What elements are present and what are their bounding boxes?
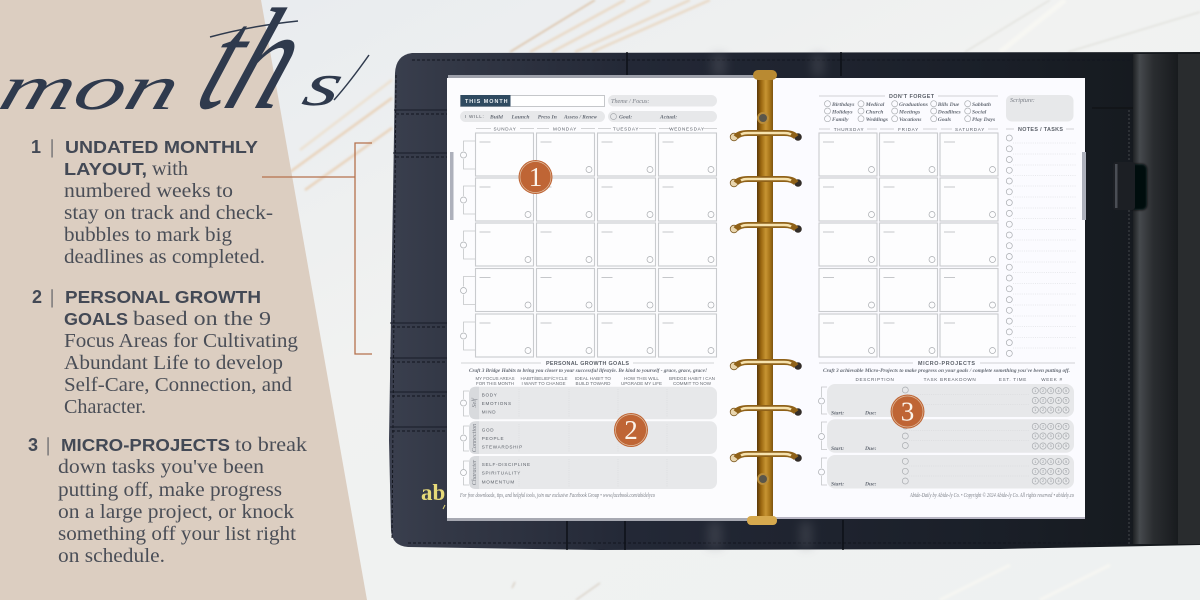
- don't forget: Bills Due: [937, 102, 960, 108]
- feature 2 text: [32, 286, 298, 418]
- gold spine: [757, 76, 773, 520]
- feature 1 text: LAYOUT,: [64, 159, 147, 179]
- micro-project column headers: [855, 377, 1063, 382]
- feature 1 text: stay on track and check-: [64, 202, 273, 224]
- micro-project row 2: 12345: [1034, 425, 1067, 429]
- micro-project row 3: 12345: [1034, 460, 1067, 464]
- scripture box: [1006, 95, 1074, 122]
- don't forget: DON'T FORGET: [889, 94, 935, 100]
- growth column headers: UPGRADE MY LIFE: [621, 381, 662, 386]
- micro-projects heading: MICRO-PROJECTS: [918, 361, 975, 367]
- growth row: connection: STEWARDSHIP: [482, 445, 523, 450]
- feature 2 text: based on the 9: [133, 308, 271, 330]
- micro-project row 2: Due:: [864, 446, 877, 452]
- growth column headers: HABIT/BELIEF/CYCLE: [520, 376, 568, 381]
- growth column headers: COMMIT TO NOW: [673, 381, 711, 386]
- growth row: character: SPIRITUALITY: [482, 471, 521, 476]
- notes and tasks: NOTES / TASKS: [1018, 127, 1063, 133]
- right day headers: THURSDAY: [834, 127, 864, 132]
- i will pill: Launch: [510, 114, 530, 120]
- feature 3 text: MICRO-PROJECTS: [61, 435, 230, 455]
- number badge 1: 1: [529, 162, 542, 192]
- theme pill: Theme / Focus:: [611, 98, 650, 105]
- feature 1 text: with: [152, 158, 188, 180]
- micro-project column headers: WEEK #: [1041, 377, 1063, 382]
- growth column headers: MY FOCUS AREAS: [476, 376, 515, 381]
- i will pill: Press In: [538, 114, 557, 120]
- goal pill: [608, 111, 717, 122]
- right page sheet: [773, 78, 1085, 518]
- left day headers: TUESDAY: [613, 126, 639, 132]
- micro-project column headers: TASK BREAKDOWN: [924, 377, 976, 382]
- binder cover: [389, 52, 1200, 550]
- right day headers: [819, 127, 998, 132]
- micro-project row 2: 12345: [1034, 444, 1067, 448]
- growth row: self: MIND: [482, 410, 496, 415]
- growth row: character: SELF-DISCIPLINE: [482, 462, 531, 467]
- number badge 3: [890, 394, 924, 428]
- micro-projects heading: [819, 361, 1075, 374]
- personal growth heading: PERSONAL GROWTH GOALS: [546, 361, 629, 367]
- micro-project row 3: Start:: [831, 482, 844, 488]
- right calendar grid: [819, 133, 998, 357]
- growth column headers: BUILD TOWARD: [576, 381, 610, 386]
- bottom cap: [747, 516, 777, 525]
- feature 2 text: Focus Areas for Cultivating: [64, 330, 298, 352]
- micro-project row 1: 12345: [1034, 389, 1067, 393]
- don't forget: [819, 94, 998, 123]
- micro-project row 2: [818, 419, 1074, 453]
- growth row: self: Self: [471, 397, 478, 408]
- left page sheet: [447, 78, 757, 518]
- feature 3 text: 3: [28, 435, 38, 455]
- left footer: For free downloads, tips, and helpful tools, join our exclusive Facebook Group • www.facebook.com/abidelyco: [459, 492, 655, 499]
- number badge 2: [614, 413, 648, 447]
- micro-project column headers: DESCRIPTION: [855, 377, 895, 382]
- feature 2 text: PERSONAL GROWTH: [65, 287, 261, 307]
- don't forget: Sabbath: [972, 102, 991, 108]
- growth row: character: Character: [471, 459, 478, 485]
- left day headers: WEDNESDAY: [669, 126, 705, 132]
- number badge 3: 3: [901, 396, 914, 426]
- feature 1 text: numbered weeks to: [64, 180, 233, 202]
- binder spine band: [1133, 54, 1178, 544]
- feature 2 text: GOALS: [64, 309, 128, 329]
- micro-project row 3: 12345: [1034, 479, 1067, 483]
- don't forget: Vacations: [899, 117, 921, 123]
- micro-project row 1: 12345: [1034, 399, 1067, 403]
- feature 2 text: |: [50, 286, 54, 308]
- micro-project row 2: Start:: [831, 446, 844, 452]
- number badge 1: [518, 160, 552, 194]
- growth column headers: I WANT TO CHANGE: [522, 381, 566, 386]
- i will pill: I WILL:: [465, 114, 484, 119]
- growth row: character: [460, 456, 717, 489]
- beige side panel: [0, 0, 367, 600]
- feature 3 text: on schedule.: [58, 545, 165, 567]
- goal pill: Actual:: [659, 114, 677, 120]
- don't forget: Birthdays: [831, 102, 854, 108]
- personal growth heading: [461, 361, 714, 374]
- script title: s: [296, 51, 352, 119]
- left calendar grid: [476, 133, 716, 357]
- feature 3 text: |: [46, 434, 50, 456]
- right day headers: FRIDAY: [898, 127, 919, 132]
- personal growth heading: Craft 3 Bridge Habits to bring you closer to your successful lifestyle. Be kind to yourself - grace, grace, grace!: [469, 368, 707, 374]
- micro-project column headers: EST. TIME: [999, 377, 1027, 382]
- growth column headers: BRIDGE HABIT I CAN: [669, 376, 715, 381]
- binder outer panel: [1178, 54, 1200, 544]
- micro-project row 1: 12345: [1034, 408, 1067, 412]
- don't forget: Social: [972, 109, 987, 115]
- don't forget: Church: [866, 109, 883, 115]
- week brackets: [460, 141, 475, 350]
- feature 3 text: putting off, make progress: [58, 479, 282, 501]
- left day headers: [476, 126, 717, 132]
- left day headers: SUNDAY: [493, 126, 517, 132]
- binder pockets and seams: [390, 52, 1190, 550]
- growth row: connection: GOD: [482, 428, 494, 432]
- micro-project row 3: [818, 455, 1074, 488]
- micro-project row 1: [818, 384, 1074, 417]
- binder: [389, 52, 1200, 550]
- feature 1 text: UNDATED MONTHLY: [65, 137, 258, 157]
- feature 2 text: Abundant Life to develop: [64, 352, 283, 374]
- feature 1 text: bubbles to mark big: [64, 224, 232, 246]
- feature 1 text: |: [50, 136, 54, 158]
- growth row: connection: [460, 421, 717, 454]
- goal pill: Goal:: [619, 114, 632, 120]
- planner left page: [447, 75, 757, 521]
- feature 1 text: deadlines as completed.: [64, 246, 265, 268]
- feature 3 text: on a large project, or knock: [58, 501, 295, 523]
- micro-project row 1: Start:: [831, 410, 844, 416]
- don't forget: Meetings: [898, 109, 920, 115]
- growth row: connection: Connection: [471, 424, 478, 452]
- this month bar: [460, 95, 604, 106]
- growth row: self: [460, 387, 717, 419]
- feature 3 text: down tasks you've been: [58, 456, 264, 478]
- don't forget: Medical: [865, 102, 885, 108]
- don't forget: Holidays: [831, 109, 853, 115]
- i will pill: Build: [489, 114, 503, 120]
- micro-projects heading: Craft 3 achievable Micro-Projects to make progress on your goals / complete something you've been putting off.: [823, 368, 1070, 374]
- feature 2 text: Character.: [64, 396, 146, 418]
- don't forget: Weddings: [866, 117, 888, 123]
- binder reflections: [708, 54, 824, 548]
- top cap: [753, 70, 777, 80]
- page tab left: [450, 152, 454, 220]
- pen loop: [1113, 162, 1147, 210]
- feature 2 text: 2: [32, 287, 42, 307]
- micro-project row 1: Due:: [864, 410, 877, 416]
- title flourishes: [210, 21, 369, 100]
- ring binder mechanism: [730, 70, 802, 525]
- number badge 2: 2: [624, 415, 638, 445]
- feature 3 text: to break: [235, 434, 308, 456]
- feature 1 text: [31, 136, 273, 268]
- left day headers: MONDAY: [553, 126, 577, 132]
- feature 2 text: Self-Care, Connection, and: [64, 374, 292, 396]
- page tab right: [1082, 152, 1086, 220]
- don't forget: Goals: [938, 117, 951, 123]
- micro-project row 3: Due:: [864, 482, 877, 488]
- feature 1 text: 1: [31, 137, 41, 157]
- right day headers: SATURDAY: [955, 127, 985, 132]
- micro-project row 3: 12345: [1034, 470, 1067, 474]
- callout bracket: [262, 143, 372, 354]
- growth column headers: FOR THIS MONTH: [476, 381, 514, 386]
- rivets: [758, 113, 768, 484]
- marble veins: [290, 0, 1200, 600]
- don't forget: Family: [832, 117, 849, 123]
- i will pill: Assess / Renew: [563, 114, 597, 120]
- growth row: connection: PEOPLE: [482, 436, 504, 441]
- right footer: Abide-Daily by Abide-ly Co. • Copyright © 2024 Abide-ly Co. All rights reserved • abidely.co: [909, 492, 1074, 499]
- don't forget: Play Days: [972, 117, 995, 123]
- planner right page: [773, 78, 1086, 519]
- growth column headers: HOW THIS WILL: [624, 376, 660, 381]
- scripture box: Scripture:: [1010, 97, 1035, 104]
- foil logo: ab: [421, 480, 445, 505]
- micro-project row 2: 12345: [1034, 434, 1067, 438]
- theme pill: [608, 95, 717, 106]
- growth column headers: IDEAL HABIT TO: [575, 376, 612, 381]
- this month bar: THIS MONTH: [465, 99, 509, 105]
- growth row: self: EMOTIONS: [482, 401, 512, 406]
- growth row: character: MOMENTUM: [482, 479, 515, 484]
- don't forget: Graduations: [899, 102, 928, 108]
- script title: [0, 0, 369, 140]
- growth column headers: [476, 376, 715, 386]
- notes and tasks: [1006, 127, 1076, 356]
- feature 3 text: [28, 434, 308, 567]
- feature 3 text: something off your list right: [58, 523, 296, 545]
- i will pill: [460, 111, 605, 122]
- rings: [730, 133, 802, 462]
- growth row: self: BODY: [482, 392, 498, 398]
- don't forget: Deadlines: [937, 109, 961, 115]
